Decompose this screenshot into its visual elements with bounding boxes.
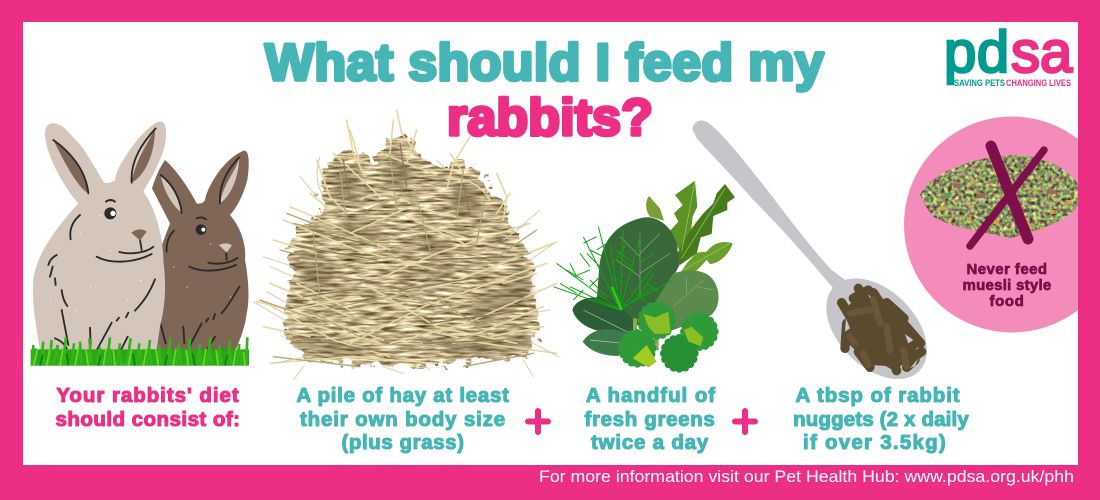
light veined leaf (650, 271, 719, 330)
illustration: two rabbits on grass (31, 122, 249, 366)
broccoli (622, 305, 715, 369)
pdsa logo: SAVING PETS (954, 78, 1005, 88)
panel: never feed muesli (904, 116, 1078, 332)
caption: rabbits diet: Your rabbits' diet (56, 384, 240, 407)
plus sign (735, 411, 755, 432)
warning text: food (990, 293, 1024, 310)
lower dark leaves (572, 297, 635, 337)
pdsa logo: CHANGING LIVES (1006, 78, 1071, 88)
dark hollows (290, 153, 533, 355)
caption: hay: their own body size (300, 408, 506, 431)
caption: greens: twice a day (591, 431, 709, 454)
light rabbit (33, 122, 231, 353)
spoon (693, 120, 946, 398)
warning text: Never feed (966, 261, 1048, 278)
brown rabbit (150, 151, 249, 357)
dark straws (293, 143, 527, 350)
illustration: pile of hay (253, 110, 558, 380)
caption: greens (585, 384, 716, 454)
grass (31, 337, 249, 366)
caption: hay: A pile of hay at least (296, 384, 510, 407)
title (265, 34, 824, 147)
warning text: muesli style (962, 277, 1052, 294)
caption: greens: A handful of (586, 384, 716, 407)
caption: nuggets: if over 3.5kg) (803, 431, 947, 454)
light straws (257, 110, 557, 363)
pdsa logo (944, 20, 1073, 88)
nuggets (842, 288, 922, 371)
illustration: spoon of nuggets (693, 120, 946, 398)
pink circle (904, 116, 1078, 332)
caption: rabbits diet: should consist of: (56, 408, 240, 431)
mid straws (260, 157, 537, 367)
red cross (991, 146, 1028, 239)
caption: nuggets: A tbsp of rabbit (795, 384, 961, 407)
dill fronds (553, 227, 673, 310)
title: What should I feed my (265, 34, 824, 92)
muesli pile (920, 155, 1078, 238)
illustration: fresh greens (553, 181, 735, 369)
pdsa logo: pd (944, 20, 1010, 85)
caption: rabbits diet (56, 384, 240, 431)
dandelion leaves (646, 181, 735, 273)
caption: nuggets (793, 384, 969, 454)
pdsa logo: sa (1011, 20, 1073, 85)
caption: greens: fresh greens (585, 408, 715, 431)
caption: nuggets: nuggets (2 x daily (793, 408, 969, 431)
caption: hay (296, 384, 510, 454)
caption: hay: (plus grass) (341, 431, 465, 454)
plus sign (528, 411, 548, 432)
dark leaf (597, 217, 680, 327)
warning text (963, 262, 1052, 306)
footer link text: For more information visit our Pet Health Hub: www.pdsa.org.uk/phh (539, 467, 1074, 486)
wisps (253, 157, 558, 380)
title: rabbits? (447, 89, 653, 147)
